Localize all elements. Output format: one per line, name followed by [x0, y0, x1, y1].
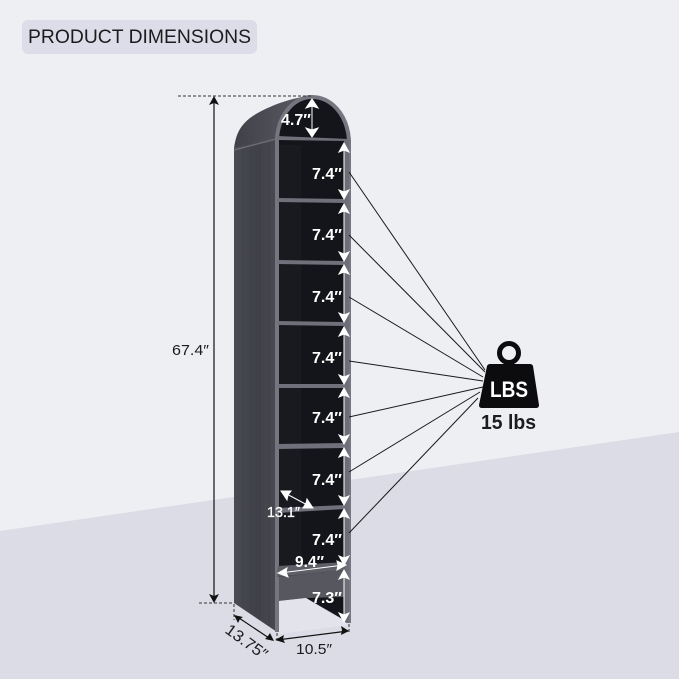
depth label: 13.75″: [222, 621, 271, 664]
floor background: [0, 432, 679, 679]
width label: 10.5″: [296, 641, 333, 658]
white dimension labels: 7.4″: [312, 350, 342, 367]
icon: weight: LBS: [490, 377, 528, 402]
white dimension labels: 4.7″: [281, 112, 311, 129]
white dimension labels: 9.4″: [295, 554, 324, 571]
side panel: [234, 138, 277, 632]
arrow: top arch height: [306, 99, 318, 137]
curved top surface: [234, 96, 312, 148]
white dimension labels: 7.4″: [312, 410, 342, 427]
icon: weight: [479, 344, 539, 408]
shelves: [277, 136, 349, 577]
title pill: PRODUCT DIMENSIONS: [28, 27, 251, 48]
white dimension labels: 7.4″: [312, 227, 342, 244]
open bottom: [279, 598, 349, 634]
arrow: inner width: [278, 561, 346, 577]
bookcase: [234, 96, 349, 634]
height label: 67.4″: [172, 342, 210, 359]
arrow: width: [275, 626, 349, 643]
white dimension labels: 13.1″: [267, 504, 301, 521]
white dimension labels: 7.4″: [312, 289, 342, 306]
white dimension labels: 7.3″: [312, 590, 342, 607]
kick panel: [279, 570, 344, 601]
white dimension labels: 7.4″: [312, 532, 342, 549]
white dimension labels: [267, 112, 342, 607]
weight label: 15 lbs: [481, 412, 536, 434]
arrow: depth: [234, 615, 274, 641]
arrow: inner depth: [281, 491, 313, 508]
white dimension labels: 7.4″: [312, 472, 342, 489]
white shelf height arrows: [339, 143, 349, 622]
height dashed guides: [178, 96, 349, 640]
title pill: [22, 20, 257, 54]
connector lines to weight icon: [349, 172, 485, 533]
front interior: [277, 98, 349, 623]
arrow: height: [209, 96, 219, 603]
white dimension labels: 7.4″: [312, 166, 342, 183]
front frame: [277, 97, 349, 632]
